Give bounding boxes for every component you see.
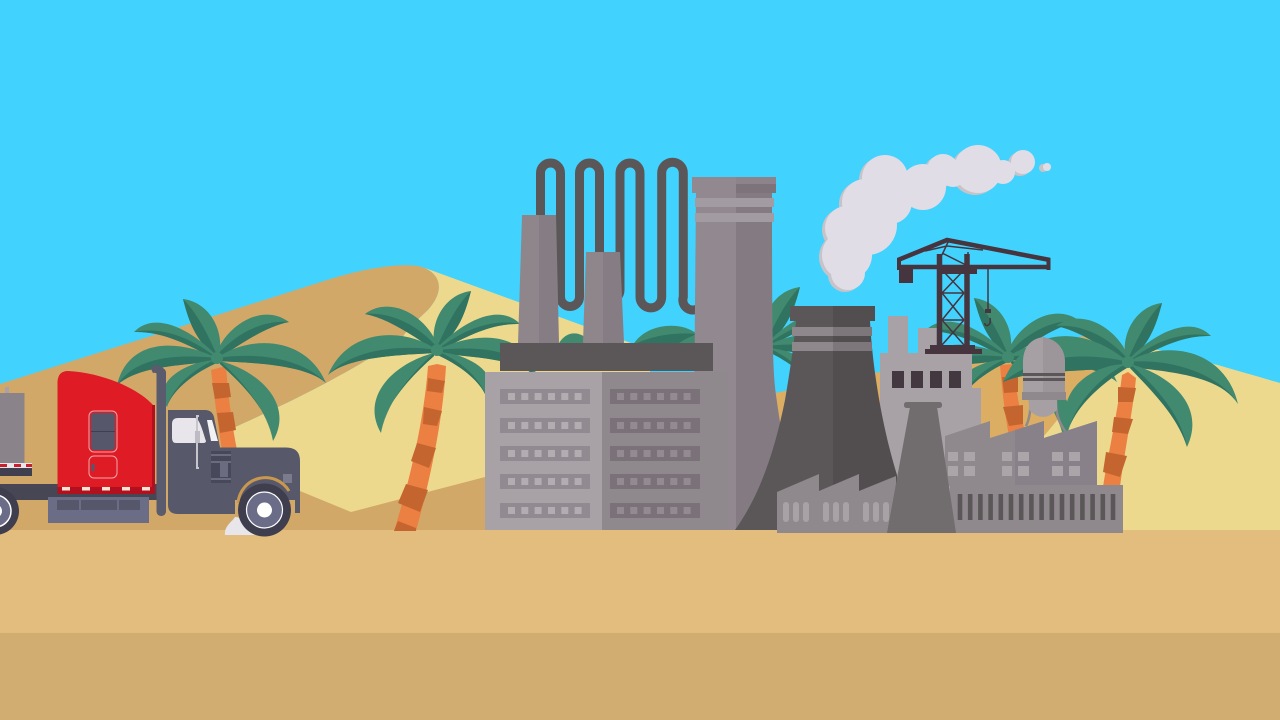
tower legs: [1026, 400, 1065, 431]
palm 4 trunk: [1103, 372, 1136, 487]
water tower: [1022, 337, 1066, 431]
left small windows: [508, 393, 582, 514]
main building: [485, 343, 728, 530]
gray panel: [283, 474, 292, 483]
cooling tower bands: [792, 327, 833, 336]
palm 1 crown: [117, 299, 326, 441]
crane base: [930, 345, 975, 349]
right small windows: [617, 393, 691, 514]
trailer tank: [0, 393, 24, 463]
pipe coil: [540, 162, 700, 310]
factory slots: [783, 502, 889, 522]
tower cap: [692, 177, 736, 193]
ground: sand: [0, 530, 1280, 633]
factory chimneys: [888, 316, 937, 356]
ground: lower band: [0, 633, 1280, 720]
mirror: [196, 415, 199, 469]
cooling tower cap: [790, 306, 833, 321]
chimney 1: [518, 215, 559, 343]
palm 2 crown: [328, 291, 537, 433]
palm 2 trunk: [394, 364, 446, 531]
chimney 2: [583, 252, 624, 343]
sawtooth windows: [948, 452, 1080, 476]
truck chassis: [0, 484, 160, 500]
palm 1 trunk: [211, 366, 237, 450]
hood vent: [211, 451, 231, 483]
tower bands: [695, 198, 774, 207]
trailer deck stripe: [0, 463, 32, 468]
left wing: [485, 372, 602, 530]
crane hook: [985, 269, 991, 326]
left window strips: [500, 389, 590, 518]
front wheel: [238, 484, 291, 536]
palm trees: [117, 287, 1238, 531]
tank ring: [1022, 392, 1066, 400]
truck tractor hood: [168, 410, 300, 514]
factory windows: [892, 371, 961, 388]
leaves behind factory right: [633, 326, 697, 345]
tank bowl: [1029, 400, 1057, 417]
exhaust stack: [151, 365, 166, 516]
low building with bars: [950, 485, 1123, 533]
front cone stack: [887, 402, 956, 533]
dust puff: [225, 517, 256, 535]
crane jib: [898, 240, 1050, 260]
light dune, middle: [233, 268, 650, 530]
right wing: [602, 372, 728, 530]
light dune, right: [1040, 347, 1280, 530]
palm 3 trunk: [1000, 364, 1026, 436]
crane mast: [940, 254, 967, 350]
fender: [238, 478, 289, 503]
back tan dune, left: [0, 265, 439, 530]
tall tower: [692, 177, 783, 530]
cab door hatch: [89, 456, 117, 478]
back factory: [880, 316, 981, 500]
sawtooth factory: [945, 421, 1097, 486]
tank bands: [1023, 373, 1065, 381]
smoke plume: [819, 145, 1051, 292]
palm 4 crown: [1003, 303, 1238, 447]
windshield: [172, 418, 206, 443]
crane counterweight: [899, 269, 913, 283]
truck red sleeper cab: [58, 371, 155, 494]
cab lights: [62, 487, 150, 490]
foreground tan dune wedge: [230, 440, 640, 530]
rear wheel: [0, 487, 19, 535]
crane: [897, 240, 1050, 354]
palm behind tower: [657, 287, 866, 429]
fuel tank step: [48, 497, 149, 523]
tan dune, right: [640, 335, 1130, 530]
roof: [500, 343, 713, 371]
palm 3 crown: [908, 298, 1117, 440]
tower body: [693, 193, 736, 530]
cab window: [89, 411, 117, 452]
trailer: [0, 387, 160, 535]
small sawtooth factory: [777, 474, 896, 533]
tank: [1023, 337, 1043, 392]
leaf behind factory left: [558, 333, 586, 345]
right window strips: [610, 389, 700, 518]
dark cooling tower: [735, 306, 900, 530]
factory body: [880, 353, 981, 500]
